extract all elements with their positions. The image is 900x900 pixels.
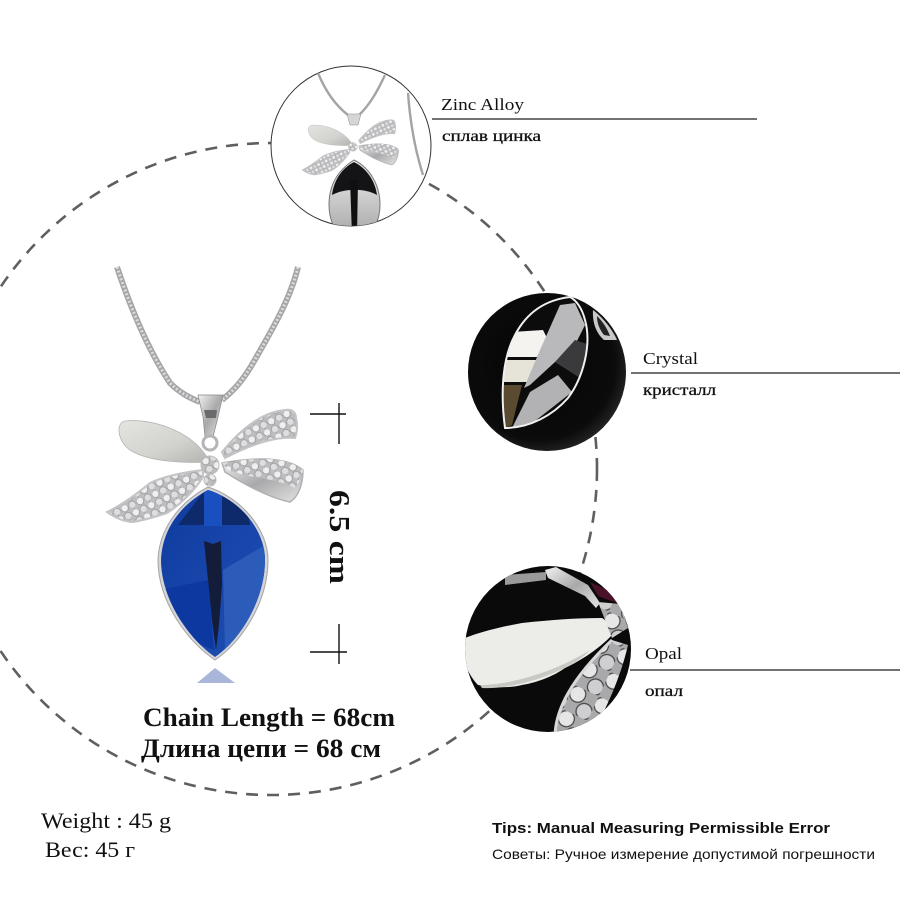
label: opal: Opal bbox=[645, 644, 682, 663]
tips text: Советы: Ручное измерение допустимой погрешности bbox=[492, 846, 875, 862]
dimension marker: 6.5 cm: 6.5 cm bbox=[323, 490, 355, 584]
label: crystal: Crystal bbox=[643, 349, 698, 368]
thumbnail bow bbox=[302, 120, 398, 175]
weight text: Вес: 45 г bbox=[45, 837, 135, 862]
detail circle: crystal bbox=[468, 293, 626, 451]
thumbnail chain bbox=[318, 73, 423, 175]
tips text: Tips: Manual Measuring Permissible Error bbox=[492, 820, 830, 837]
necklace chain bbox=[117, 267, 298, 402]
opal petal bbox=[463, 618, 612, 687]
weight text: Weight : 45 g bbox=[41, 808, 171, 833]
chain length text: Chain Length = 68cm bbox=[143, 703, 395, 732]
gem reflection bbox=[197, 668, 235, 683]
chain length text: Длина цепи = 68 см bbox=[141, 734, 381, 763]
dashed outline circle bbox=[0, 143, 597, 795]
label: opal bbox=[630, 644, 900, 700]
weight text bbox=[41, 808, 171, 862]
rhinestone petal bbox=[555, 640, 628, 735]
detail circle: opal bbox=[463, 566, 631, 735]
detail circle: zinc alloy bbox=[270, 66, 432, 226]
bail bbox=[198, 395, 223, 437]
bow with opal petal and rhinestones bbox=[107, 410, 303, 522]
crystal facets bbox=[504, 303, 586, 427]
label: zinc alloy: сплав цинка bbox=[442, 128, 541, 145]
label: zinc alloy: Zinc Alloy bbox=[441, 95, 525, 114]
label: opal: опал bbox=[645, 683, 683, 700]
label: zinc alloy bbox=[432, 95, 757, 145]
label: crystal bbox=[631, 349, 900, 399]
thumbnail gem bbox=[328, 160, 380, 226]
silver bow edge bbox=[545, 567, 600, 608]
chain length text bbox=[141, 703, 395, 763]
tips text bbox=[492, 820, 875, 862]
label: crystal: кристалл bbox=[643, 382, 716, 399]
necklace illustration bbox=[107, 267, 303, 683]
blue crystal gem bbox=[155, 485, 270, 660]
